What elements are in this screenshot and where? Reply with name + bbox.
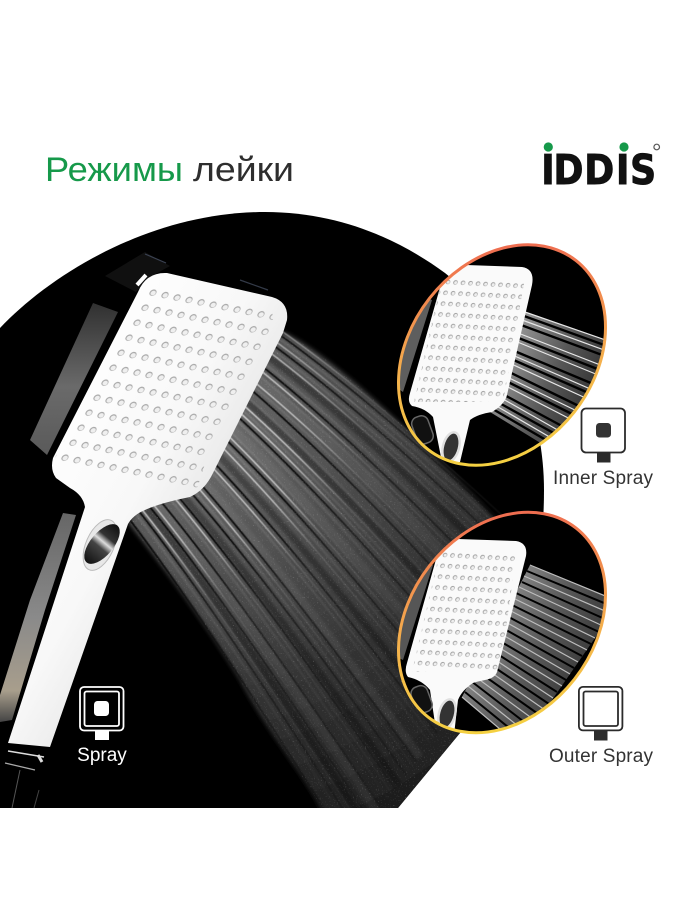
title: Режимы	[45, 151, 183, 189]
gradient ring	[356, 471, 648, 774]
icon: spray	[80, 687, 124, 740]
title: лейки	[193, 151, 294, 189]
label: spray: Spray	[77, 745, 127, 766]
outer spray streaks	[462, 564, 604, 728]
inner spray head	[409, 265, 533, 462]
inset: outer spray photo	[397, 510, 607, 734]
inner spray nozzle dots	[414, 278, 524, 402]
inner spray streaks	[490, 312, 604, 442]
spray selector button	[82, 519, 120, 571]
water speckles	[130, 334, 492, 808]
outer spray nozzle dots	[412, 551, 516, 672]
spray of water	[128, 330, 502, 808]
shower head back rim	[30, 252, 268, 455]
icon: inner spray	[582, 408, 625, 462]
icon: outer spray	[579, 687, 622, 740]
infographic canvas	[0, 142, 660, 808]
logo: iddis: IDDIS	[541, 147, 656, 195]
title	[45, 151, 294, 189]
label: outer spray: Outer Spray	[549, 746, 654, 767]
outer spray head	[406, 539, 526, 735]
label: inner spray: Inner Spray	[553, 468, 654, 489]
inset: inner spray photo	[397, 243, 607, 467]
shower head face and handle	[8, 273, 287, 747]
hose connector	[5, 751, 44, 808]
main black circular photo	[0, 212, 544, 808]
handle side strip	[0, 513, 76, 722]
gradient ring	[356, 204, 648, 506]
head nozzle dots	[52, 284, 274, 492]
